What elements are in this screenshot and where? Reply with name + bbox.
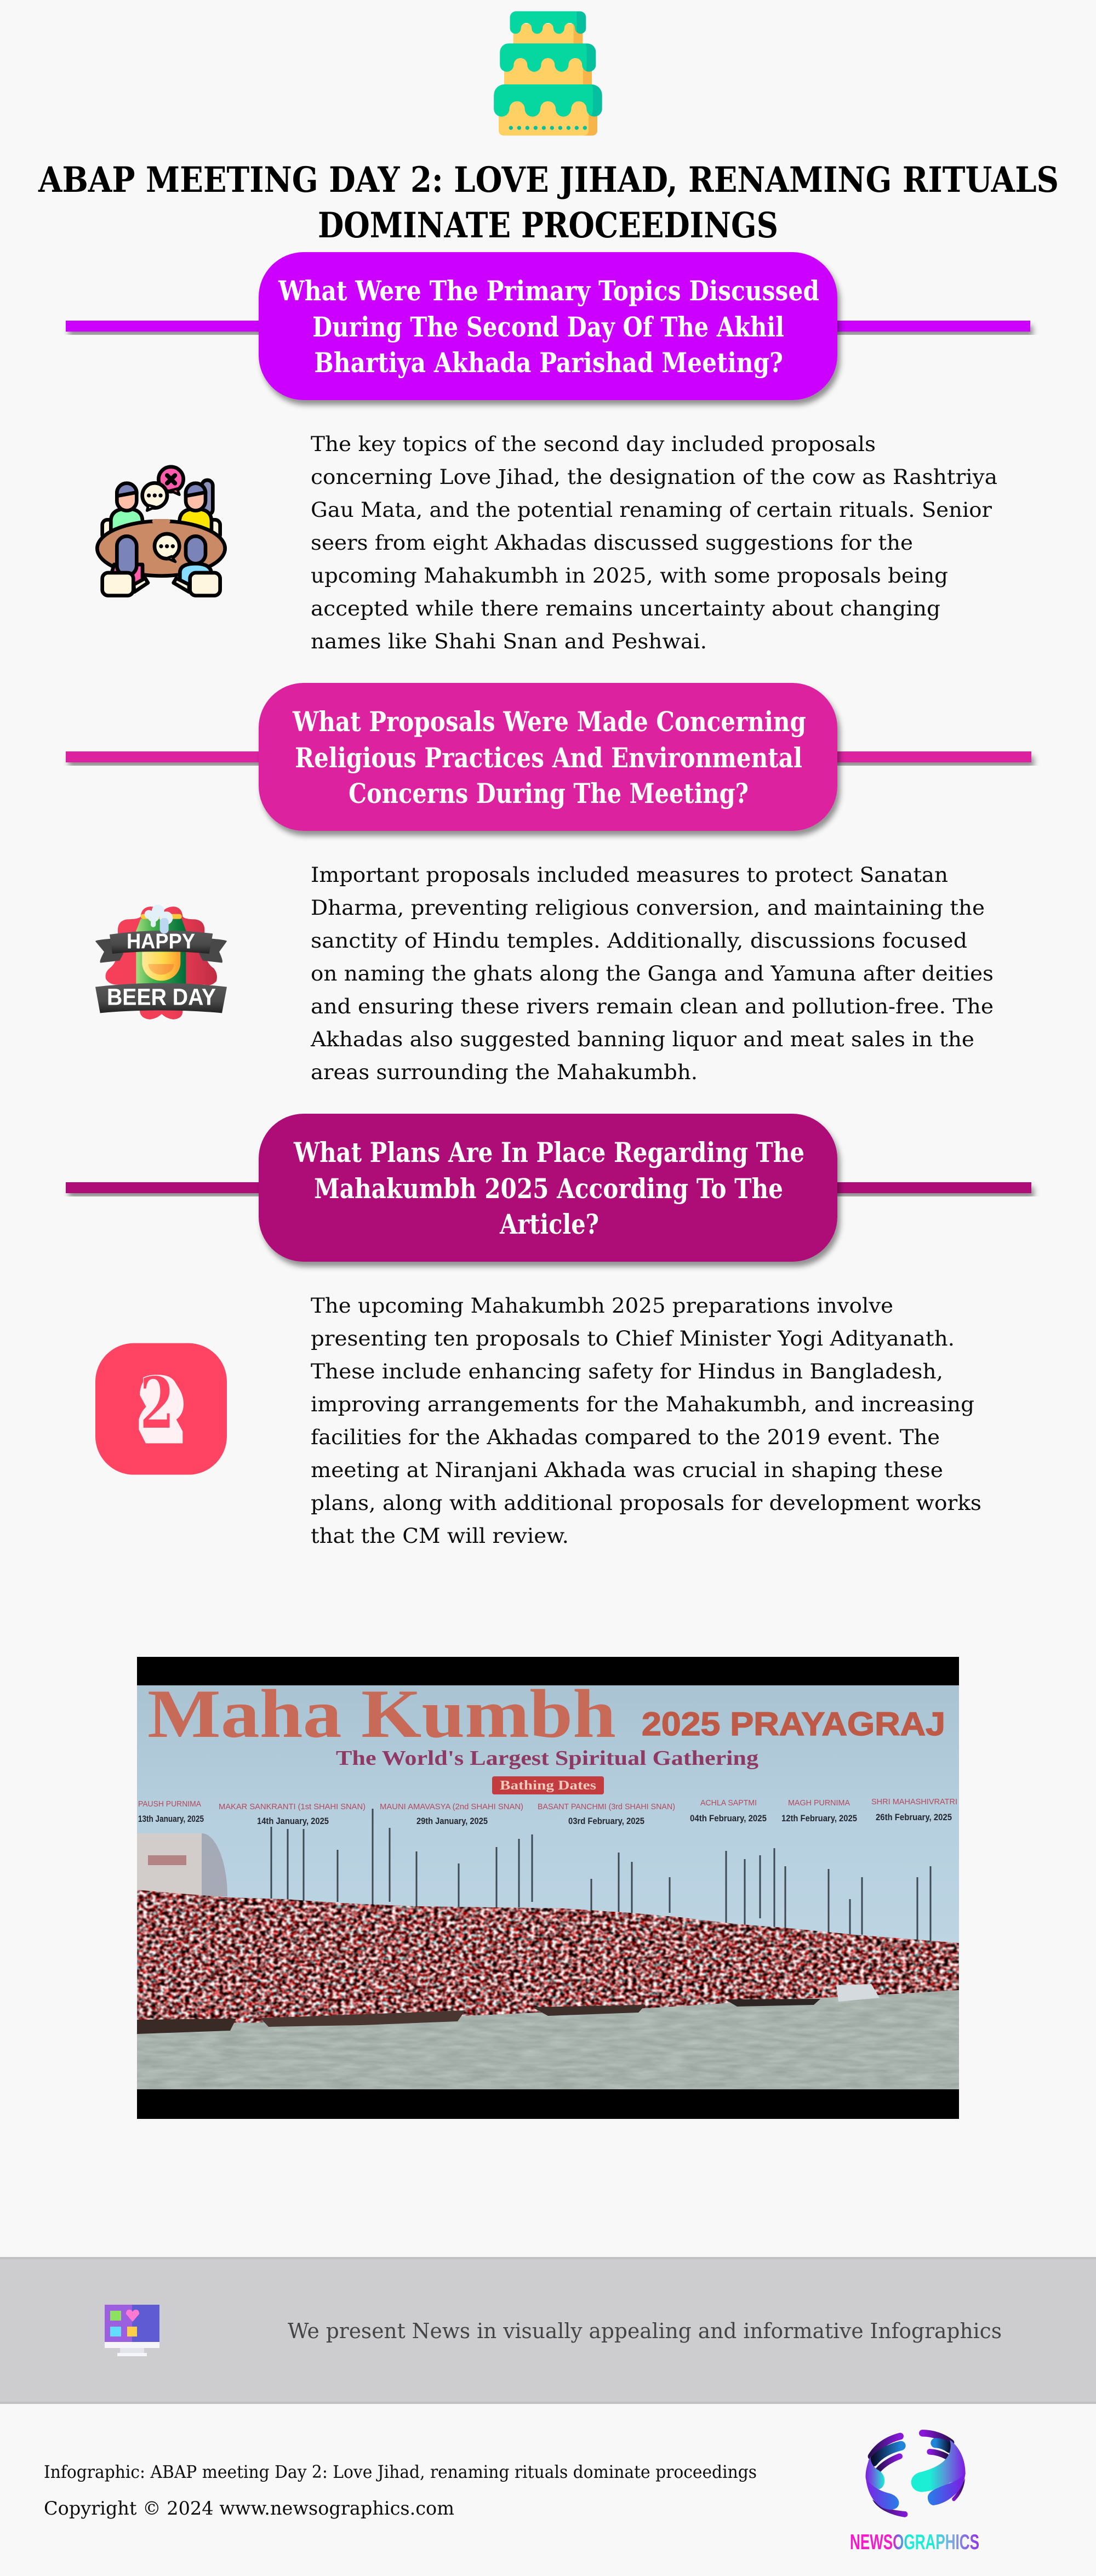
image: Maha Kumbh crowd photo: Maha Kumbh [147,1676,616,1752]
text block: section 3 answer: plans, along with additional proposals for development works [311,1491,981,1515]
panel: section 3 heading: Mahakumbh 2025 According To The [314,1172,783,1205]
image: Maha Kumbh crowd photo: 12th February, 2025 [781,1813,857,1823]
icon: number two tile [95,1343,227,1475]
panel: section 3 heading: What Plans Are In Place Regarding The [293,1136,804,1169]
text block: section 1 answer: concerning Love Jihad, the designation of the cow as Rashtriya [311,465,997,489]
panel: section 2 heading: What Proposals Were Made Concerning [292,705,806,738]
logo: Newsographics globe and wordmark: NEWSOGRAPHICS [850,2531,979,2554]
panel: section 3 heading: Article? [499,1208,599,1240]
image: Maha Kumbh crowd photo: MAUNI AMAVASYA (2nd SHAHI SNAN) [380,1802,523,1811]
text block: section 2 answer: Dharma, preventing religious conversion, and maintaining the [311,896,985,920]
text block: section 1 answer: seers from eight Akhadas discussed suggestions for the [311,531,913,555]
text block: section 3 answer: These include enhancing safety for Hindus in Bangladesh, [311,1360,943,1383]
title: DOMINATE PROCEEDINGS [318,205,778,246]
panel: section 1 heading [66,252,1030,400]
text block: section 1 answer: The key topics of the second day included proposals [311,432,876,456]
icon: number two tile: 2 [140,1361,174,1445]
image: Maha Kumbh crowd photo: 03rd February, 2025 [568,1816,644,1826]
text block: section 2 answer: sanctity of Hindu temples. Additionally, discussions focused [311,929,967,953]
image: Maha Kumbh crowd photo: PAUSH PURNIMA [138,1799,201,1809]
text block: section 2 answer [310,863,994,1084]
text block: section 3 answer: presenting ten proposals to Chief Minister Yogi Adityanath. [311,1327,955,1350]
text block: section 1 answer: Gau Mata, and the potential renaming of certain rituals. Senior [311,498,992,522]
text block: section 2 answer: areas surrounding the Mahakumbh. [311,1061,698,1084]
text block: section 3 answer: facilities for the Akhadas compared to the 2019 event. The [311,1426,940,1449]
text block: section 3 answer: that the CM will review. [311,1524,569,1548]
text block: section 2 answer: and ensuring these rivers remain clean and pollution-free. The [311,995,994,1018]
footer caption: Infographic: ABAP meeting Day 2: Love Jihad, renaming rituals dominate proceedings [44,2461,757,2482]
image: Maha Kumbh crowd photo: BASANT PANCHMI (3rd SHAHI SNAN) [538,1802,675,1811]
panel: section 1 heading: What Were The Primary Topics Discussed [278,275,819,307]
text block: section 1 answer: accepted while there remains uncertainty about changing [311,597,940,620]
panel: section 2 heading: Concerns During The Meeting? [349,777,749,810]
image: Maha Kumbh crowd photo: Bathing Dates [500,1779,596,1793]
tagline: We present News in visually appealing and informative Infographics [288,2319,1002,2343]
icon: meeting around a table [97,467,225,596]
logo: Newsographics globe and wordmark [850,2433,979,2554]
icon: tiered cake [494,12,602,135]
image: Maha Kumbh crowd photo: MAGH PURNIMA [788,1798,850,1808]
text block: section 3 answer: meeting at Niranjani Akhada was crucial in shaping these [311,1458,943,1482]
image: Maha Kumbh crowd photo: ACHLA SAPTMI [700,1798,757,1808]
text block: section 1 answer: upcoming Mahakumbh in 2025, with some proposals being [311,564,948,588]
text block: section 3 answer [311,1294,981,1548]
image: Maha Kumbh crowd photo [137,1657,959,2119]
icon: monitor [105,2305,159,2356]
panel: section 3 heading [66,1114,1031,1262]
title [38,159,1059,246]
image: Maha Kumbh crowd photo: 29th January, 2025 [416,1816,488,1826]
text block: section 1 answer [311,432,997,653]
panel: section 2 heading: Religious Practices And Environmental [295,742,802,774]
text block: section 2 answer: Akhadas also suggested banning liquor and meat sales in the [310,1028,974,1051]
footer caption [44,2461,757,2520]
panel: section 2 heading [66,683,1031,831]
footer caption: Copyright © 2024 www.newsographics.com [44,2498,454,2520]
image: Maha Kumbh crowd photo: SHRI MAHASHIVRATRI [871,1797,957,1806]
image: Maha Kumbh crowd photo: The World's Largest Spiritual Gathering [336,1747,758,1770]
image: Maha Kumbh crowd photo: 04th February, 2025 [690,1813,767,1823]
text block: section 1 answer: names like Shahi Snan and Peshwai. [311,630,707,653]
icon: happy beer day badge: BEER DAY [107,984,216,1010]
footer band [0,2257,1096,2404]
icon: happy beer day badge [95,904,227,1019]
panel: section 1 heading: During The Second Day Of The Akhil [312,311,784,343]
image: Maha Kumbh crowd photo: MAKAR SANKRANTI (1st SHAHI SNAN) [219,1802,366,1811]
image: Maha Kumbh crowd photo: 26th February, 2025 [876,1812,952,1822]
image: Maha Kumbh crowd photo: 14th January, 2025 [257,1816,329,1826]
image: Maha Kumbh crowd photo: 13th January, 2025 [138,1814,204,1824]
icon: happy beer day badge: HAPPY [127,930,195,954]
panel: section 1 heading: Bhartiya Akhada Parishad Meeting? [314,346,783,379]
text block: section 2 answer: Important proposals included measures to protect Sanatan [311,863,948,887]
text block: section 3 answer: The upcoming Mahakumbh 2025 preparations involve [311,1294,893,1318]
image: Maha Kumbh crowd photo: 2025 PRAYAGRAJ [642,1706,945,1742]
text block: section 2 answer: on naming the ghats along the Ganga and Yamuna after deities [311,962,994,985]
text block: section 3 answer: improving arrangements for the Mahakumbh, and increasing [311,1393,974,1416]
